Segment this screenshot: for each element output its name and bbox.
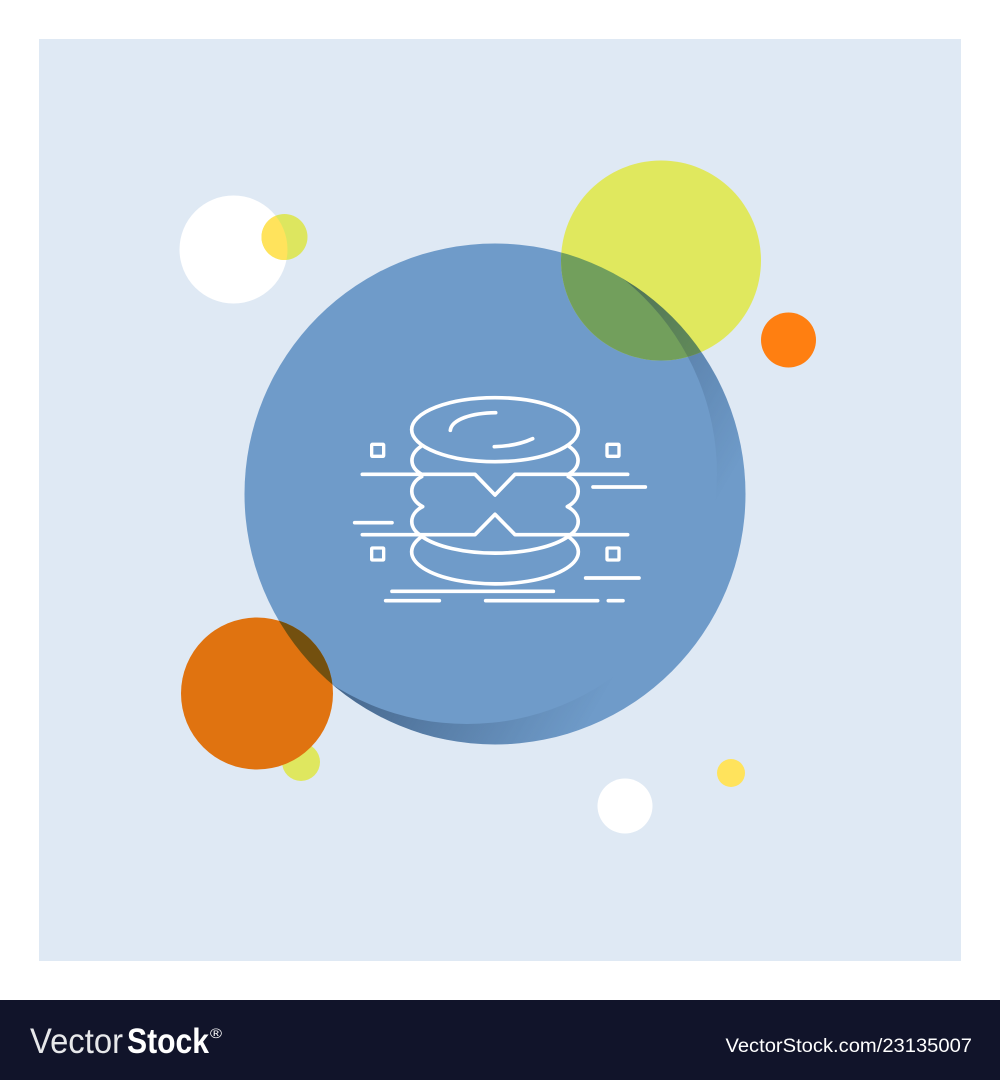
panel: background <box>39 39 961 961</box>
horizontal notched lines <box>362 474 628 535</box>
right scallops <box>567 446 578 536</box>
main blue circle <box>244 244 746 744</box>
icon: database stack line art <box>355 398 645 601</box>
footer logo: VectorStock: ® <box>210 1025 223 1041</box>
disc highlights <box>450 413 533 447</box>
bottom disc <box>412 536 578 584</box>
footer logo: VectorStock: Vector <box>30 1022 123 1061</box>
small yellow circle overlapping white circle <box>262 214 308 260</box>
left scallops <box>412 446 423 536</box>
square dots <box>372 444 619 560</box>
small yellow circle, bottom right <box>717 759 745 787</box>
small orange circle <box>761 312 816 368</box>
green overlap of yellow circle and blue circle <box>561 252 702 360</box>
large orange circle <box>181 618 333 770</box>
footer logo: VectorStock: Stock <box>127 1022 209 1061</box>
footer image id: VectorStock.com/23135007 <box>726 1036 972 1057</box>
footer logo: VectorStock <box>30 1022 223 1061</box>
dark overlap of orange circle and blue circle <box>279 620 332 684</box>
small yellow-green circle, bottom left <box>282 743 320 781</box>
accent dashes <box>355 487 645 601</box>
white circle, top left <box>180 196 288 304</box>
top disc <box>412 398 578 462</box>
footer bar <box>0 1000 1000 1080</box>
large yellow-green circle <box>561 160 761 360</box>
small white circle, bottom <box>598 778 652 834</box>
circle shadow crescent <box>332 278 732 744</box>
